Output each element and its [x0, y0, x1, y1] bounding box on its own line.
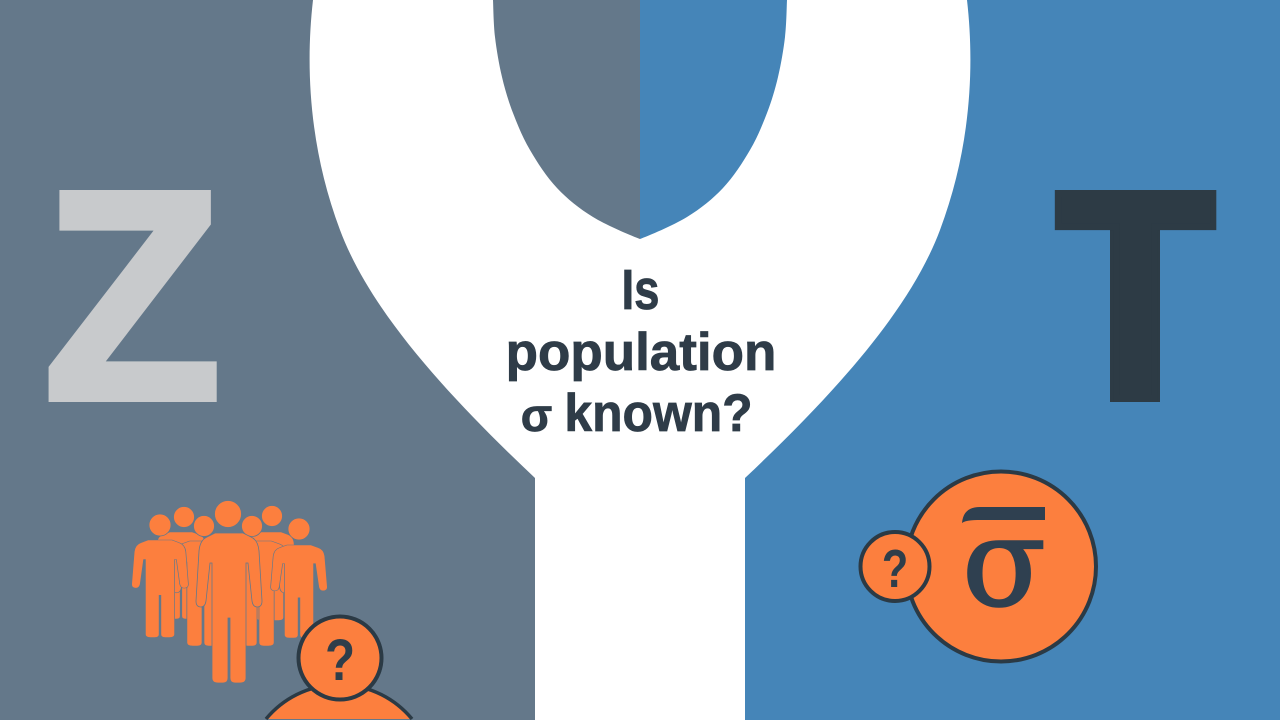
icon: sigma circle with question badge: σ [962, 492, 1046, 634]
icon: unknown person with question mark: ? [325, 628, 355, 693]
panel: right T-test background [640, 0, 1280, 720]
icon: unknown person with question mark [266, 616, 412, 719]
icon: sigma circle with question badge: ? [882, 540, 908, 599]
central question: population [506, 323, 776, 382]
icon: sigma circle with question badge [860, 472, 1096, 662]
icon: population crowd [132, 500, 327, 683]
central question [506, 257, 776, 442]
panel: left Z-test background [0, 0, 640, 720]
decision fork: white Y shape [310, 0, 970, 720]
central question: known? [564, 383, 753, 442]
letter T: T [1055, 128, 1216, 462]
letter Z: Z [43, 129, 222, 462]
central question: Is [621, 257, 660, 321]
central question: σ [521, 389, 552, 441]
